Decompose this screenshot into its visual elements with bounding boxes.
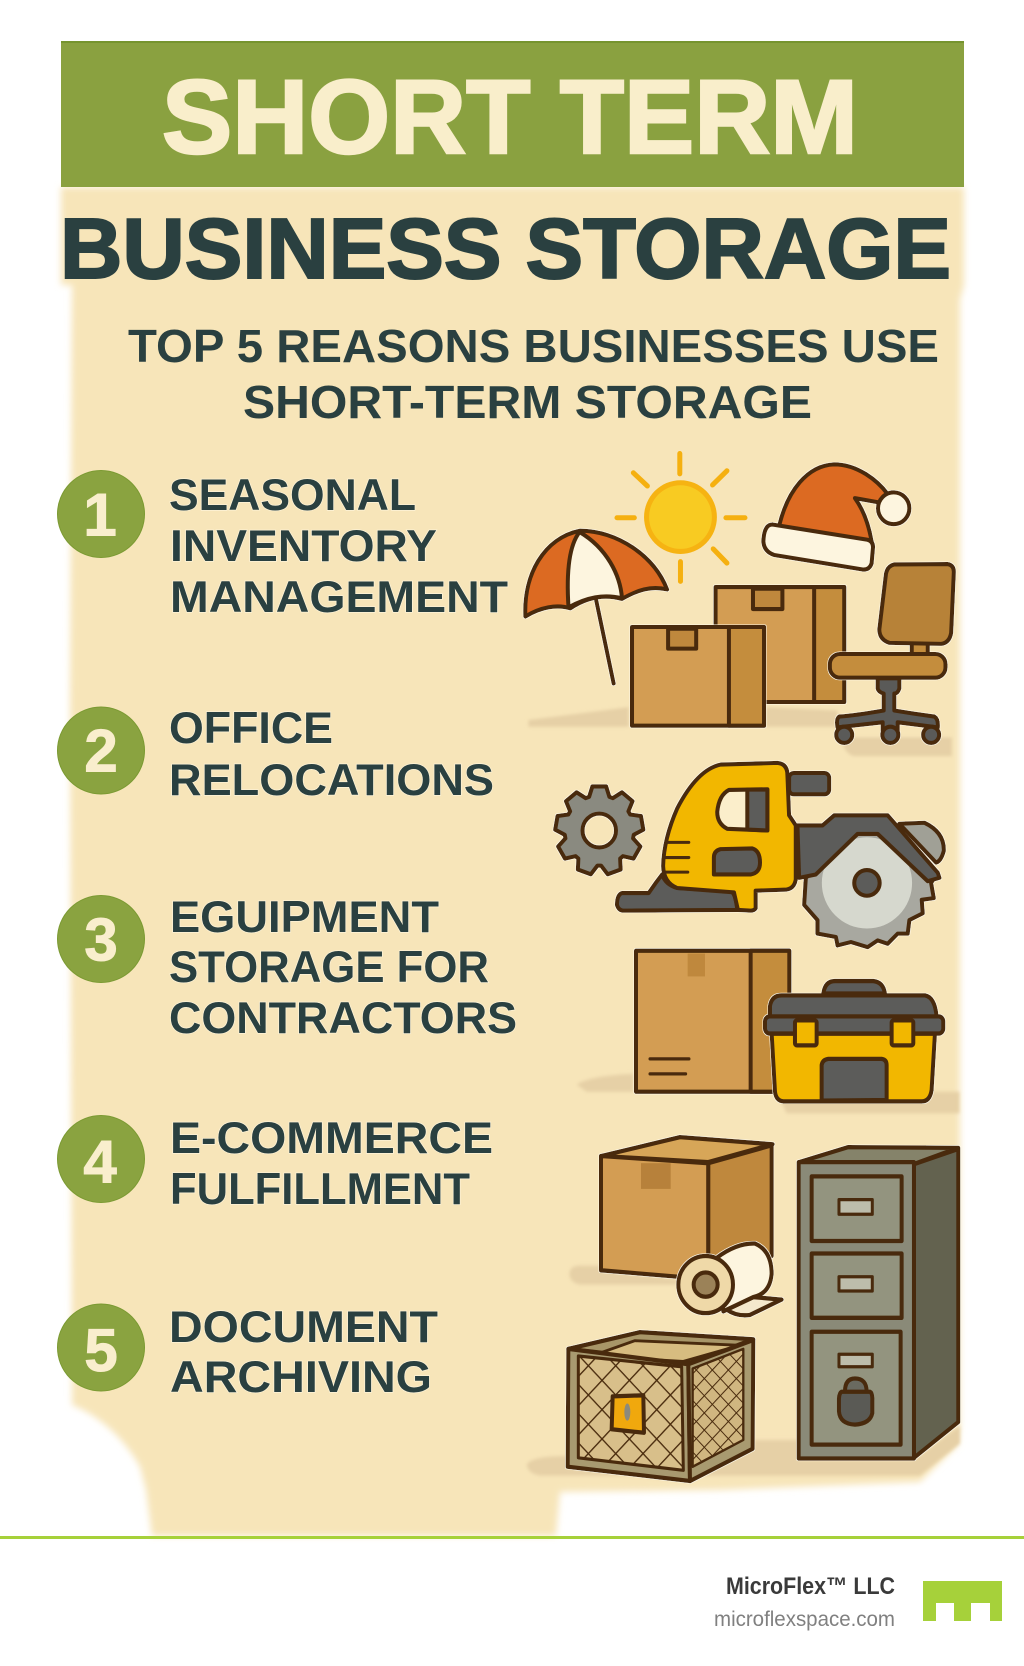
floor shadows <box>527 1074 960 1481</box>
reason 5 label: DOCUMENT <box>169 1303 438 1352</box>
floor shadows <box>528 707 952 756</box>
reason 1 label <box>169 471 508 622</box>
icon: power saw <box>617 763 944 947</box>
reason 3 label <box>169 893 517 1043</box>
reason 1 label: INVENTORY <box>170 522 437 571</box>
illustrations: contractor, fulfillment and archive <box>527 951 960 1481</box>
icon: front cardboard box <box>632 627 764 726</box>
footer brand text: MicroFlex™ LLC <box>726 1573 895 1600</box>
icon: packing tape roll <box>678 1244 782 1315</box>
icon: back cardboard box <box>716 587 844 702</box>
reason 1 label: SEASONAL <box>169 471 416 520</box>
number 3: 3 <box>84 906 118 974</box>
icon: gear <box>555 786 643 874</box>
icon: filing cabinet <box>799 1147 958 1459</box>
number badge 3 <box>58 896 144 982</box>
footer brand text: microflexspace.com <box>714 1608 895 1631</box>
reason 5 label: ARCHIVING <box>170 1353 432 1402</box>
reason 3: equipment storage for contractors <box>58 893 517 1043</box>
icon: wire crate <box>568 1332 753 1481</box>
number 4: 4 <box>83 1128 117 1196</box>
reason 3 label: EGUIPMENT <box>170 893 439 942</box>
reason 5 label <box>169 1303 438 1402</box>
icon: shipping box <box>601 1137 773 1279</box>
reason 4: e-commerce fulfillment <box>58 1114 493 1214</box>
reason 2 label: OFFICE <box>169 704 333 753</box>
title: business storage: BUSINESS STORAGE <box>60 202 951 297</box>
reason 2 label <box>169 704 494 805</box>
number badge 4 <box>58 1116 144 1202</box>
illustrations: seasonal and relocation <box>525 454 954 947</box>
icon: microflex logo <box>923 1581 1002 1621</box>
reason 3 label: CONTRACTORS <box>169 994 517 1043</box>
number badge 2 <box>58 707 144 794</box>
footer divider <box>0 1536 1024 1539</box>
icon: yellow toolbox <box>765 981 943 1101</box>
number badge 1 <box>58 470 144 558</box>
reason 2 label: RELOCATIONS <box>169 756 494 805</box>
number 5: 5 <box>84 1317 118 1384</box>
reason 1: seasonal inventory management <box>58 470 508 622</box>
number 1: 1 <box>83 482 117 548</box>
title: short term: SHORT TERM <box>162 59 858 176</box>
icon: beach umbrella <box>525 531 667 683</box>
icon: tall cardboard box <box>636 951 789 1092</box>
subtitle: TOP 5 REASONS BUSINESSES USE <box>128 320 939 372</box>
subtitle: SHORT-TERM STORAGE <box>243 376 812 428</box>
subtitle <box>128 320 939 428</box>
number 2: 2 <box>84 718 118 784</box>
reason 4 label <box>170 1114 493 1214</box>
reason 2: office relocations <box>58 704 494 805</box>
reason 4 label: FULFILLMENT <box>170 1165 470 1214</box>
title banner <box>61 41 964 187</box>
icon: sun <box>617 454 745 581</box>
number badge 5 <box>58 1304 144 1391</box>
icon: santa hat <box>763 464 909 570</box>
cream background panel <box>61 187 964 1536</box>
reason 5: document archiving <box>58 1303 438 1402</box>
footer brand text <box>714 1573 895 1631</box>
icon: office chair <box>830 564 954 743</box>
reason 4 label: E-COMMERCE <box>170 1114 493 1163</box>
reason 3 label: STORAGE FOR <box>169 943 489 992</box>
reason 1 label: MANAGEMENT <box>170 573 508 622</box>
